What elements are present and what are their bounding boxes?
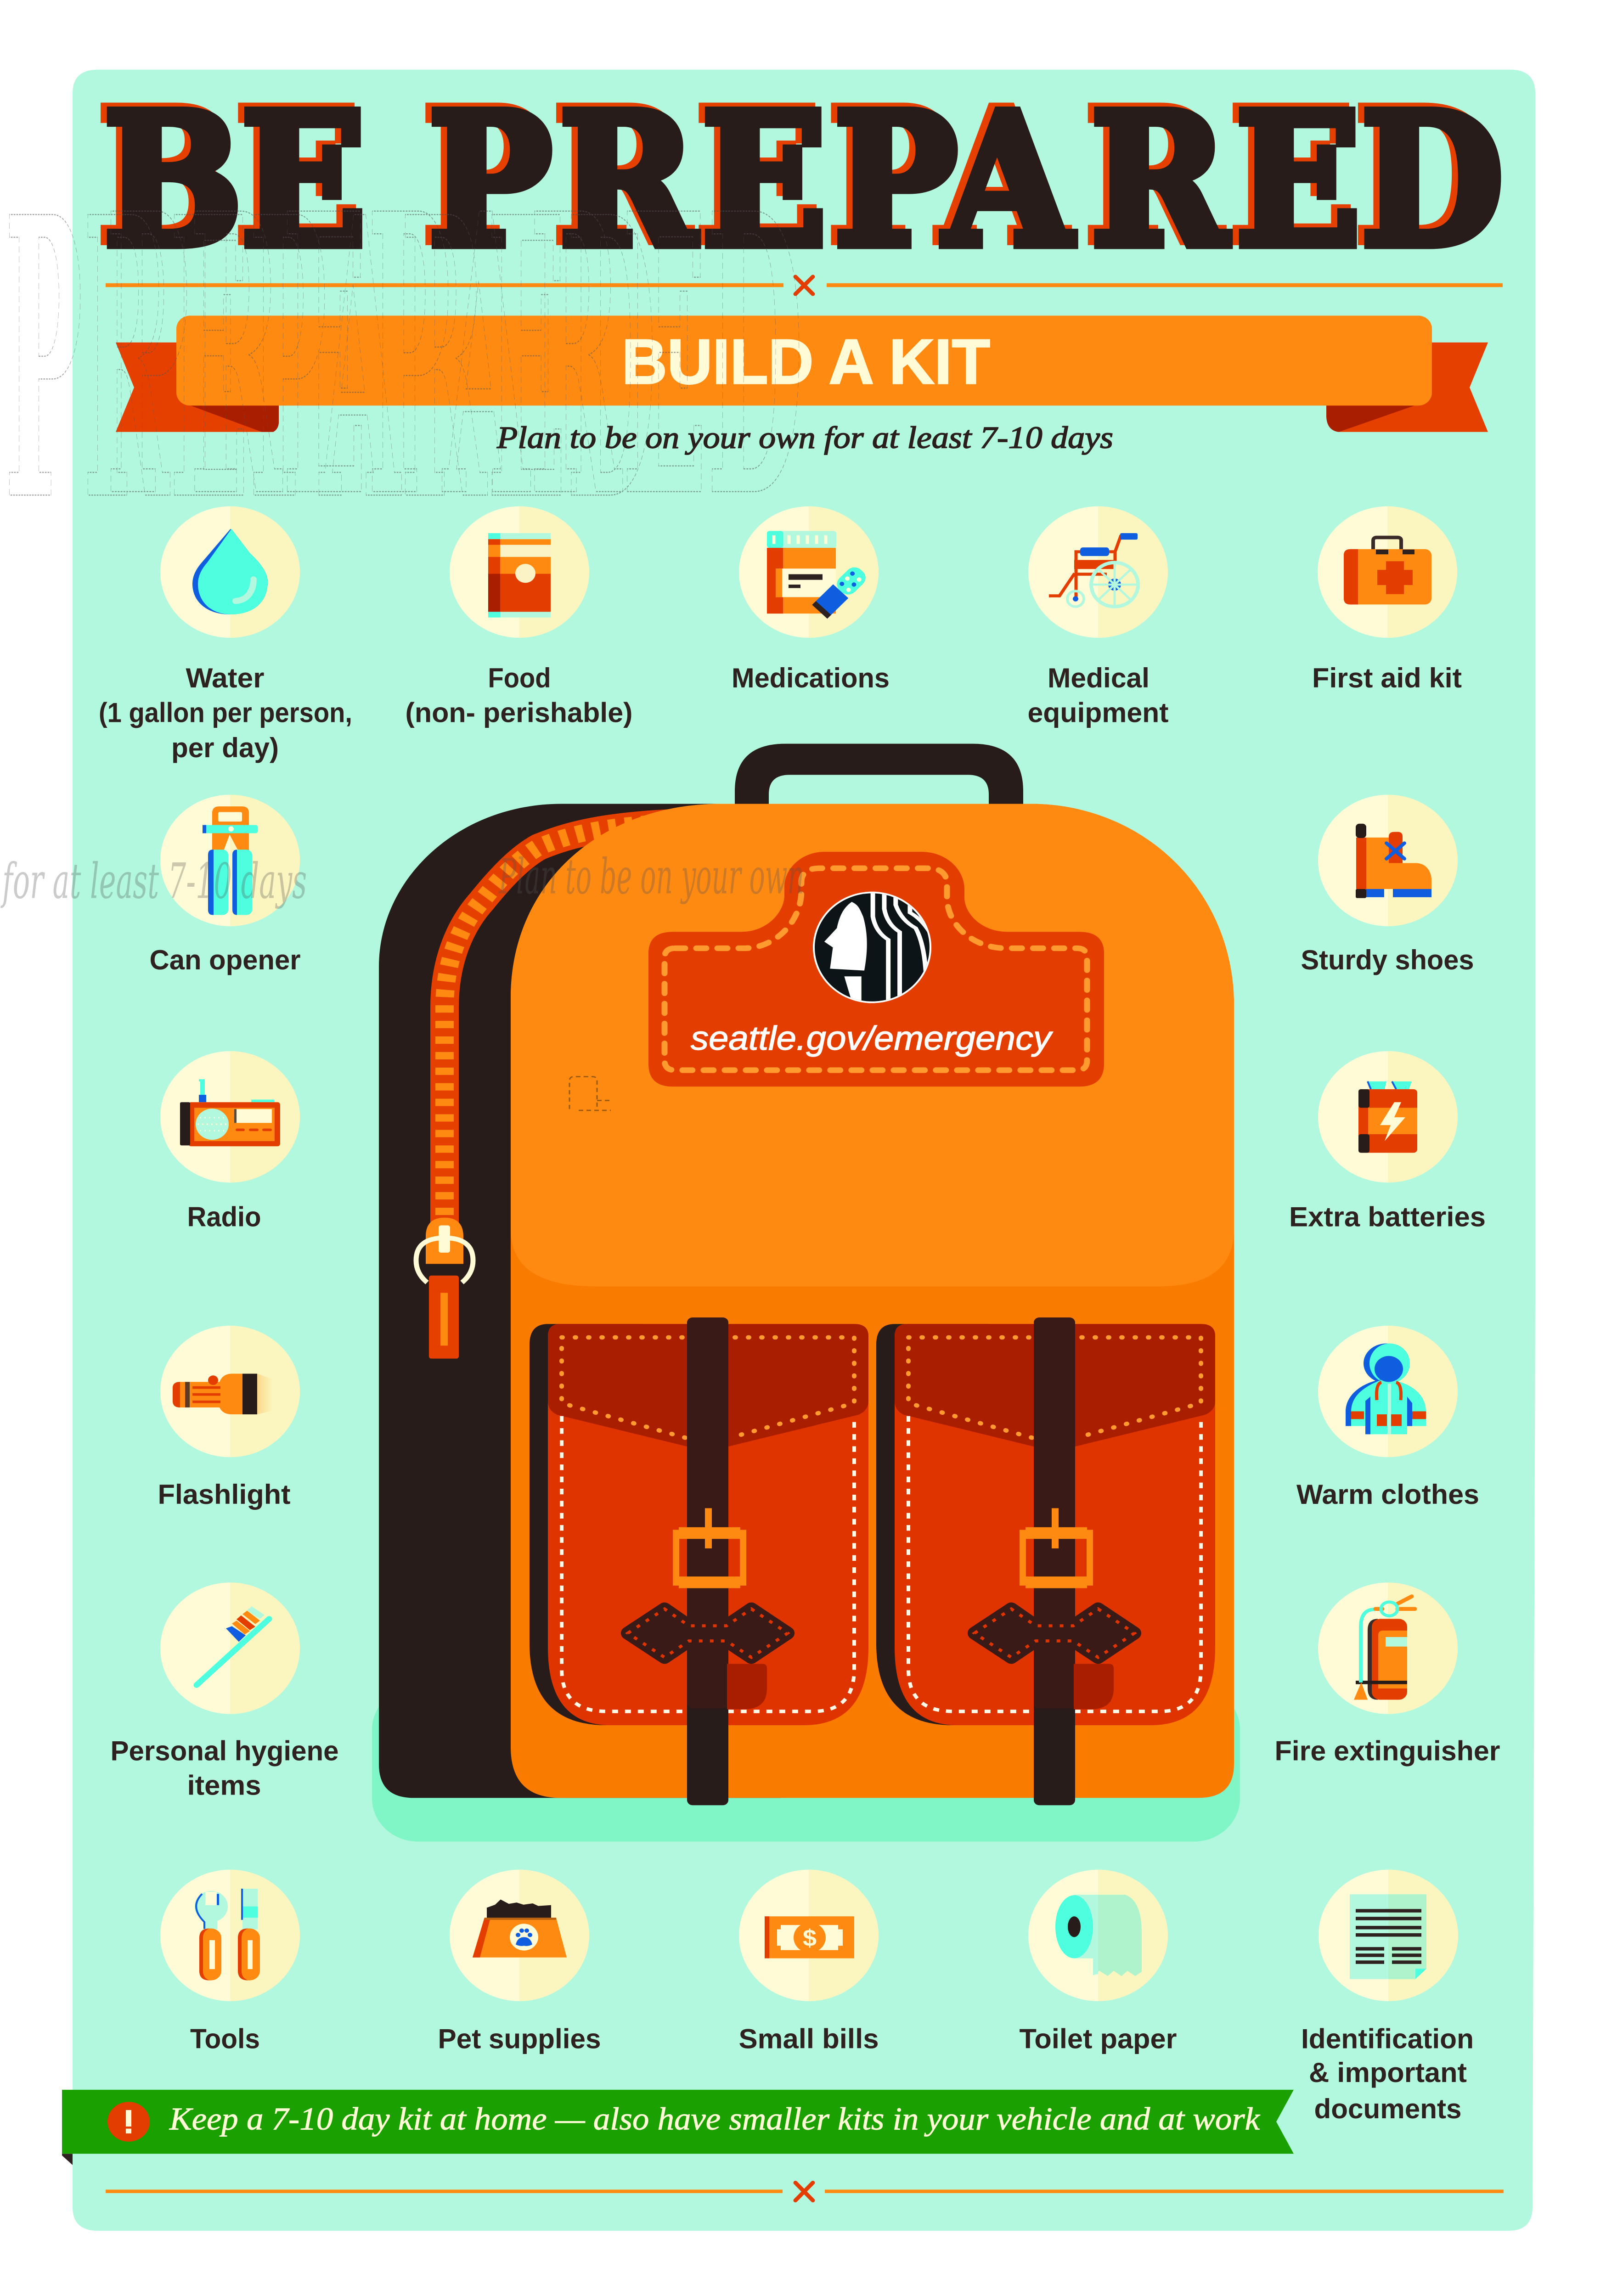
shadow under backpack — [372, 1686, 1240, 1841]
backpack handle — [735, 744, 1023, 809]
item: flashlight: Flashlight — [158, 1480, 290, 1510]
title: BE PREPARED: BE PREPARED — [97, 70, 1498, 284]
item: medical equipment: equipment — [1028, 698, 1169, 728]
banner: BUILD A KIT ribbon — [116, 315, 1488, 432]
item: can opener — [150, 795, 300, 976]
pocket right — [876, 1317, 1215, 1805]
item: first aid kit: First aid kit — [1312, 663, 1462, 694]
item: small bills — [739, 1870, 879, 2054]
item: flashlight — [158, 1326, 300, 1510]
item: can opener: Can opener — [150, 945, 300, 976]
zipper — [445, 822, 698, 1224]
item: tools: Tools — [190, 2024, 260, 2054]
backpack rear body — [379, 804, 781, 1798]
item: water: per day) — [171, 732, 279, 763]
item: water: (1 gallon per person, — [99, 698, 352, 728]
top divider with x mark — [106, 277, 1503, 294]
patch url text: seattle.gov/emergency — [691, 1019, 1053, 1058]
item: medications — [732, 506, 890, 694]
item: medical equipment — [1028, 506, 1168, 728]
item: warm clothes — [1296, 1326, 1479, 1510]
ghost artefacts: faded subtitle lettering: Plan to be on your own — [498, 848, 804, 905]
item: identification documents: & important — [1309, 2058, 1467, 2088]
item: identification documents: Identification — [1301, 2024, 1474, 2054]
pocket left — [530, 1317, 868, 1805]
Seattle logo — [813, 889, 934, 1005]
item: small bills: Small bills — [739, 2024, 879, 2054]
item: pet supplies — [438, 1870, 601, 2054]
item: food — [405, 506, 633, 728]
item: toilet paper: Toilet paper — [1020, 2024, 1177, 2054]
item: identification documents: documents — [1314, 2094, 1462, 2125]
ghost artefacts: dashed outline lettering — [9, 210, 799, 496]
item: sturdy shoes — [1301, 795, 1474, 976]
item: pet supplies: Pet supplies — [438, 2024, 601, 2054]
item: radio — [160, 1051, 300, 1232]
callout: green banner: Keep a 7-10 day kit at home — also have smaller kits in your vehicle and at work — [169, 2101, 1260, 2137]
item: water — [99, 506, 352, 763]
zipper pull — [416, 1218, 473, 1359]
item: radio: Radio — [187, 1202, 261, 1232]
subtitle: Plan to be on your own for at least 7-10 days — [496, 421, 1113, 455]
banner: BUILD A KIT ribbon: BUILD A KIT — [622, 326, 990, 397]
item: toilet paper — [1020, 1870, 1177, 2054]
backpack — [379, 744, 1234, 1805]
title: BE PREPARED: BE PREPARED — [103, 73, 1504, 287]
icon: alert — [107, 2102, 150, 2142]
item: hygiene — [110, 1582, 338, 1801]
item: fire extinguisher — [1274, 1582, 1500, 1767]
ghost artefacts: faded subtitle lettering: for at least 7-10 days — [0, 853, 307, 910]
item: sturdy shoes: Sturdy shoes — [1301, 945, 1474, 976]
item: extra batteries: Extra batteries — [1289, 1202, 1486, 1232]
item: extra batteries — [1289, 1051, 1486, 1232]
backpack front lower — [511, 804, 1234, 1798]
item: medications: Medications — [732, 663, 890, 694]
item: tools — [160, 1870, 300, 2054]
bottom divider with x mark — [106, 2183, 1504, 2200]
item: first aid kit — [1312, 506, 1462, 694]
callout: green banner — [62, 2090, 1294, 2165]
name patch — [648, 852, 1104, 1086]
item: food: Food — [488, 663, 551, 694]
item: warm clothes: Warm clothes — [1296, 1480, 1479, 1510]
item: small bills: $ — [803, 1925, 817, 1951]
item: water: Water — [186, 663, 264, 694]
backpack front upper — [511, 804, 1234, 1286]
item: hygiene: items — [187, 1770, 261, 1801]
item: fire extinguisher: Fire extinguisher — [1274, 1736, 1500, 1767]
item: food: (non- perishable) — [405, 698, 632, 728]
item: hygiene: Personal hygiene — [110, 1736, 338, 1767]
ghost artefacts: faded subtitle lettering — [0, 848, 804, 910]
ghost artefact: small dashed mark — [569, 1077, 611, 1110]
item: medical equipment: Medical — [1048, 663, 1150, 694]
item: identification documents — [1301, 1870, 1474, 2125]
